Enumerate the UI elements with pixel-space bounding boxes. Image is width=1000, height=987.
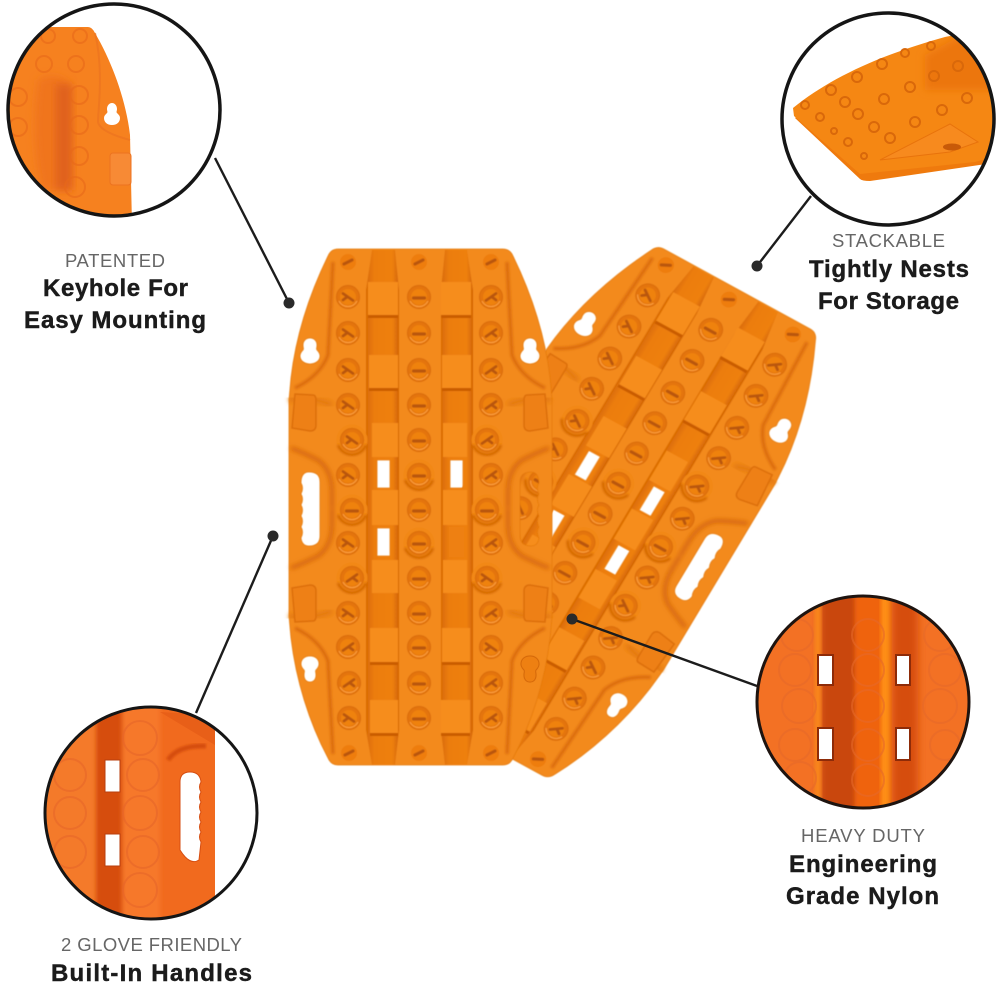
inset circle: handles close-up <box>40 700 257 925</box>
callout line: stackable <box>752 196 811 272</box>
label: patented keyhole: PATENTED <box>65 250 165 271</box>
label: stackable: For Storage <box>818 288 959 315</box>
label: glove friendly <box>51 934 252 987</box>
label: stackable: STACKABLE <box>832 230 945 251</box>
rear traction board (rotated) <box>352 225 854 799</box>
callout line: handles <box>196 530 278 713</box>
label: stackable: Tightly Nests <box>809 256 969 283</box>
inset circle: nylon close-up <box>756 594 970 810</box>
callout line: nylon <box>566 614 757 686</box>
front traction board <box>289 249 552 765</box>
label: patented keyhole: Easy Mounting <box>24 307 206 334</box>
label: heavy duty <box>786 825 939 910</box>
inset circle: keyhole close-up <box>0 4 220 225</box>
label: heavy duty: Grade Nylon <box>786 883 939 910</box>
label: stackable <box>809 230 969 315</box>
label: heavy duty: Engineering <box>789 851 937 878</box>
label: glove friendly: Built-In Handles <box>51 960 252 987</box>
label: patented keyhole: Keyhole For <box>43 275 188 302</box>
label: glove friendly: 2 GLOVE FRIENDLY <box>61 934 242 955</box>
label: heavy duty: HEAVY DUTY <box>801 825 925 846</box>
label: patented keyhole <box>24 250 206 334</box>
callout line: keyhole <box>215 158 294 308</box>
filled slot and keyhole on front board <box>449 527 539 682</box>
inset circle: stacked boards close-up <box>782 13 1000 225</box>
